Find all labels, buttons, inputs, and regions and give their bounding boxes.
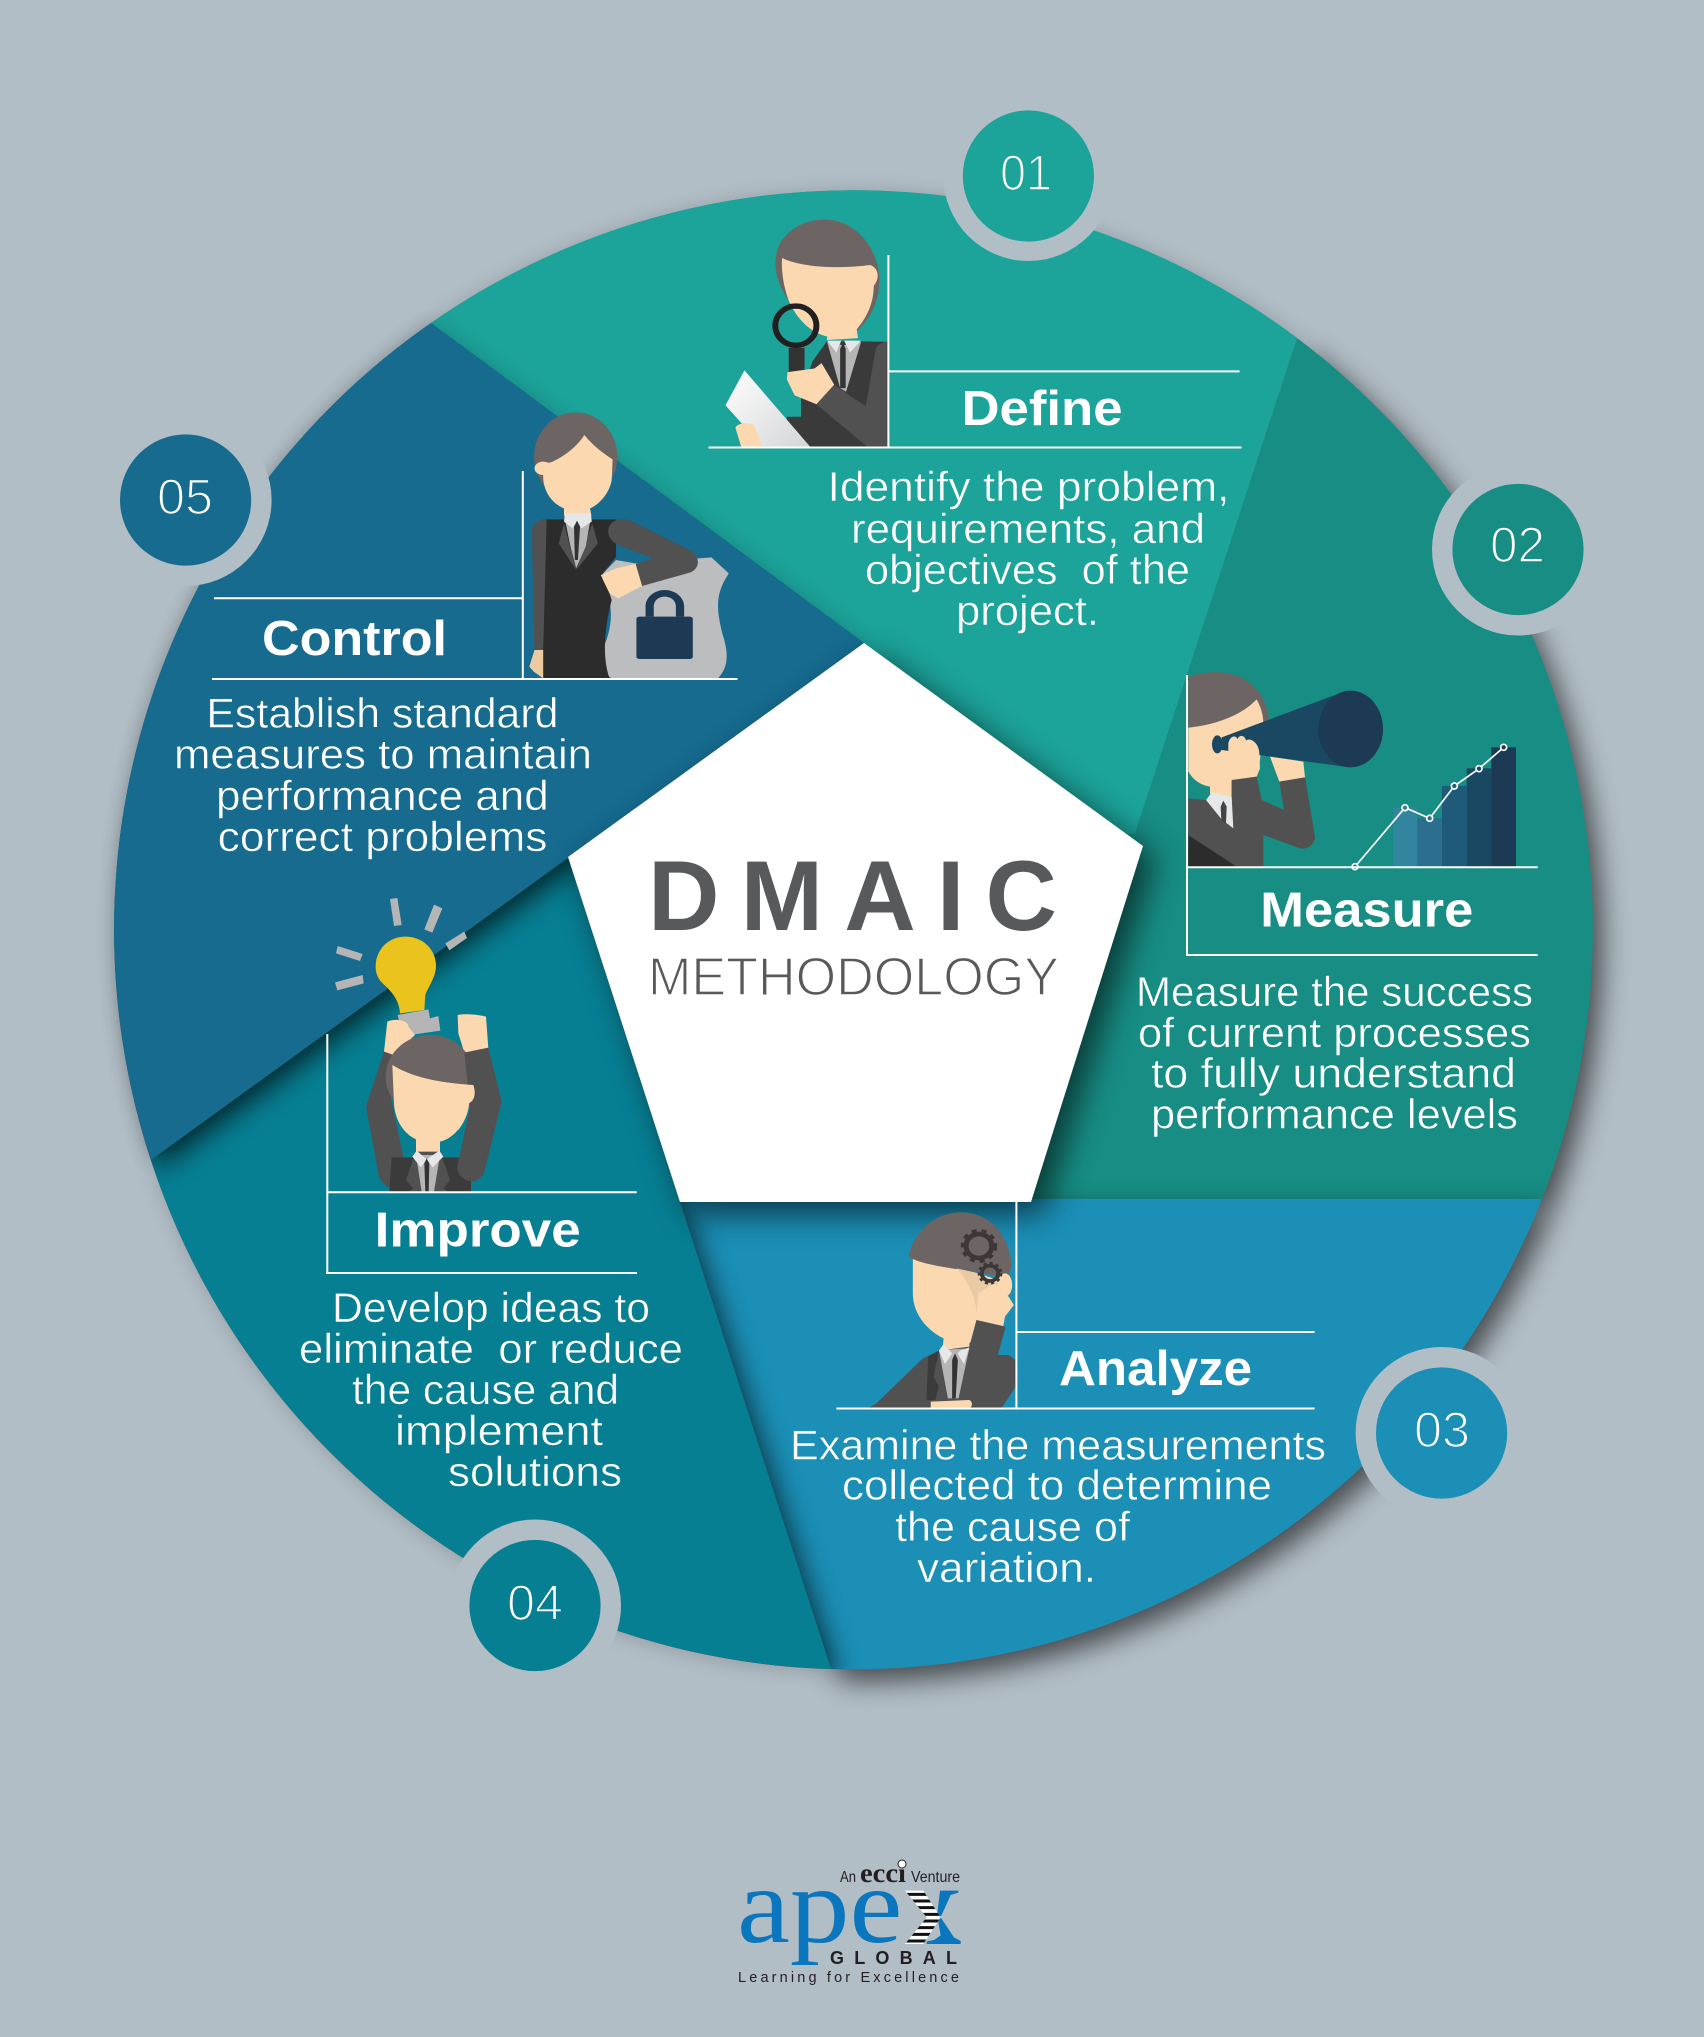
logo: apex global: apex — [737, 1847, 962, 1966]
description: analyze: Examine the measurements — [790, 1422, 1326, 1468]
frame lines — [1186, 675, 1538, 955]
panel: analyze segment — [680, 1199, 1542, 1669]
description: measure: performance levels — [1151, 1091, 1518, 1138]
heading: measure: Measure — [1260, 884, 1473, 938]
number badge 05 — [100, 414, 272, 586]
number badge 01 — [943, 91, 1113, 261]
frame lines — [326, 1034, 637, 1273]
icon: businessman with magnifying glass — [725, 220, 888, 447]
description: analyze: variation. — [917, 1544, 1096, 1591]
step 05: control — [174, 412, 738, 860]
number badge 05: 05 — [157, 469, 213, 525]
logo: apex global: An — [840, 1869, 856, 1886]
description: define: objectives of the — [865, 546, 1190, 593]
icon: businesswoman with padlock shield — [529, 412, 729, 678]
logo: apex global: GLOBAL — [830, 1948, 957, 1968]
number badge 04 — [449, 1520, 621, 1692]
description: control: correct problems — [218, 813, 547, 860]
number badge 02 — [1432, 464, 1604, 636]
description: measure: to fully understand — [1151, 1050, 1516, 1097]
description: analyze — [790, 1422, 1326, 1591]
bar chart with trend line — [1352, 744, 1516, 870]
logo: apex global: Learning for Excellence — [738, 1970, 959, 1986]
description: measure: Measure the success — [1136, 968, 1533, 1015]
description: control — [174, 690, 592, 860]
panel: improve segment — [151, 857, 831, 1669]
description: measure: of current processes — [1138, 1009, 1531, 1056]
description: define — [828, 463, 1230, 634]
heading: improve: Improve — [375, 1204, 581, 1258]
number badge 04: 04 — [507, 1575, 563, 1631]
description: analyze: collected to determine — [842, 1462, 1272, 1508]
frame lines — [836, 1202, 1315, 1408]
logo: apex global: Venture — [911, 1869, 960, 1886]
description: analyze: the cause of — [895, 1503, 1130, 1550]
description: control: measures to maintain — [174, 730, 592, 778]
step 01: define — [708, 220, 1242, 634]
number badge 03: 03 — [1414, 1402, 1470, 1458]
number badge 01: 01 — [1000, 145, 1052, 201]
frame lines — [212, 471, 738, 679]
description: improve — [299, 1284, 683, 1495]
description: control: performance and — [216, 772, 549, 819]
description: improve: implement — [395, 1407, 603, 1454]
step 03: analyze — [790, 1202, 1326, 1591]
number badge 03 — [1356, 1347, 1528, 1519]
logo: apex global: ecci — [860, 1858, 907, 1888]
title: DMAIC methodology — [648, 840, 1059, 1007]
description: define: project. — [956, 587, 1099, 634]
icon: businessman holding light bulb — [335, 898, 502, 1192]
icon: businessman thinking with gears — [867, 1212, 1016, 1408]
description: measure — [1136, 968, 1533, 1138]
center pentagon — [568, 643, 1143, 1202]
step 04: improve — [299, 898, 683, 1495]
step 02: measure — [1136, 672, 1538, 1138]
panel: control segment — [114, 323, 864, 1160]
icon: striped x stroke — [903, 1890, 961, 1944]
heading: control: Control — [262, 612, 447, 666]
description: improve: Develop ideas to — [332, 1284, 650, 1331]
heading: define: Define — [962, 382, 1122, 436]
title: DMAIC methodology: DMAIC — [648, 840, 1057, 951]
description: improve: solutions — [448, 1448, 622, 1495]
description: control: Establish standard — [206, 690, 558, 736]
description: improve: the cause and — [352, 1366, 619, 1413]
panel: measure segment — [864, 338, 1593, 1199]
icon: businessman with telescope — [1188, 672, 1383, 867]
number badge 02: 02 — [1490, 517, 1545, 573]
description: define: Identify the problem, — [828, 463, 1230, 510]
description: define: requirements, and — [851, 505, 1205, 552]
panel: define segment — [431, 190, 1297, 900]
title: DMAIC methodology: METHODOLOGY — [648, 947, 1059, 1007]
heading: analyze: Analyze — [1059, 1342, 1252, 1396]
frame lines — [708, 255, 1242, 448]
description: improve: eliminate or reduce — [299, 1325, 683, 1372]
